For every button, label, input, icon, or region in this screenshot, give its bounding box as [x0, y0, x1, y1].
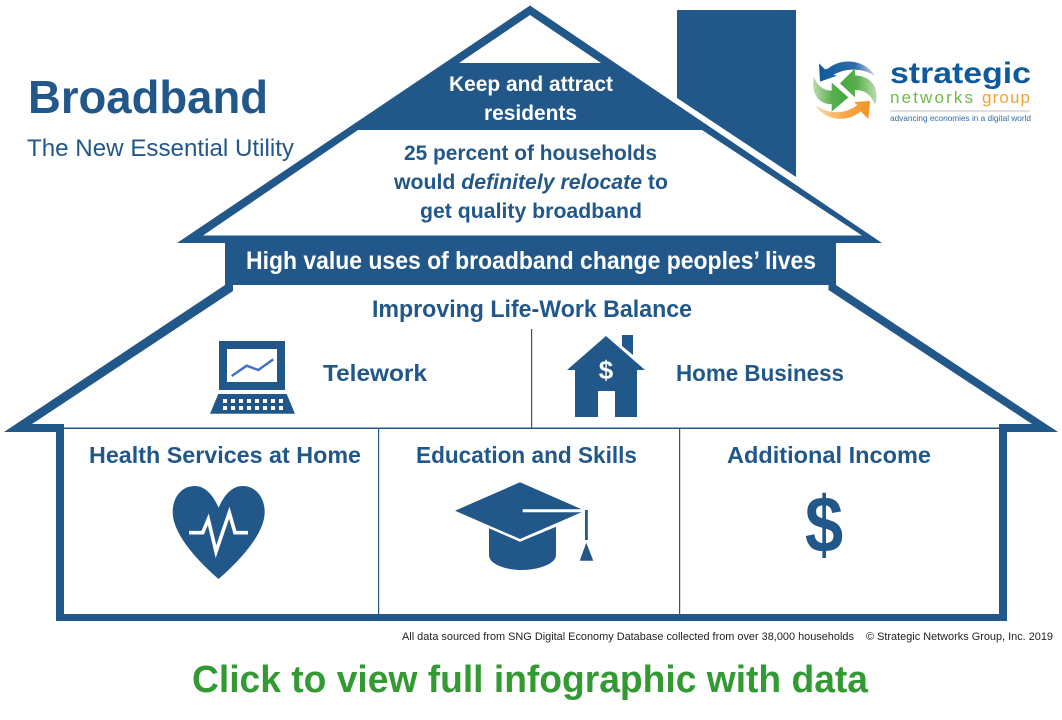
- heading: education: Education and Skills: [416, 442, 637, 468]
- heading: health: Health Services at Home: [89, 442, 361, 468]
- label: telework: Telework: [323, 360, 427, 386]
- icon: house with dollar sign: $: [599, 355, 614, 385]
- roof text: relocation statistic: [393, 142, 668, 223]
- chimney: [677, 10, 796, 177]
- roof text: relocation statistic: would definitely relocate to: [393, 171, 668, 194]
- logo arrows: [813, 61, 877, 119]
- section heading: life-work balance: Improving Life-Work Balance: [372, 296, 692, 323]
- icon: house with dollar sign: [567, 335, 645, 417]
- logo wordmark: strategic: [890, 57, 1031, 90]
- roof heading: keep and attract residents: Keep and attract: [449, 73, 613, 96]
- logo: strategic networks group: networks: [890, 88, 973, 107]
- logo: strategic networks group: group: [982, 88, 1030, 107]
- roof heading: keep and attract residents: residents: [484, 102, 577, 125]
- icon: laptop: [210, 341, 295, 414]
- roof text: relocation statistic: get quality broadband: [420, 200, 642, 223]
- subtitle: The New Essential Utility: [27, 135, 294, 162]
- banner text: High value uses of broadband change peoples’ lives: [246, 247, 816, 275]
- title block: [27, 71, 294, 162]
- panel: additional income: [727, 442, 931, 569]
- icon: dollar sign: $: [805, 479, 843, 569]
- icon: graduation cap: [455, 482, 593, 570]
- icon: heart with pulse: [173, 486, 265, 579]
- logo: strategic networks group: advancing economies in a digital world: [890, 113, 1031, 123]
- heading: income: Additional Income: [727, 442, 931, 468]
- label: home business: Home Business: [676, 360, 844, 386]
- panel: health services at home: [89, 442, 361, 579]
- title: Broadband: [28, 71, 268, 123]
- source note: All data sourced from SNG Digital Economy Database collected from over 38,000 households © Strategic Networks Group, Inc. 2019: [402, 631, 1053, 643]
- roof text: relocation statistic: 25 percent of households: [404, 142, 657, 165]
- call to action: Click to view full infographic with data: [192, 659, 869, 701]
- logo: strategic networks group: [813, 57, 1031, 123]
- panel: education and skills: [416, 442, 637, 570]
- roof heading: keep and attract residents: [449, 73, 613, 125]
